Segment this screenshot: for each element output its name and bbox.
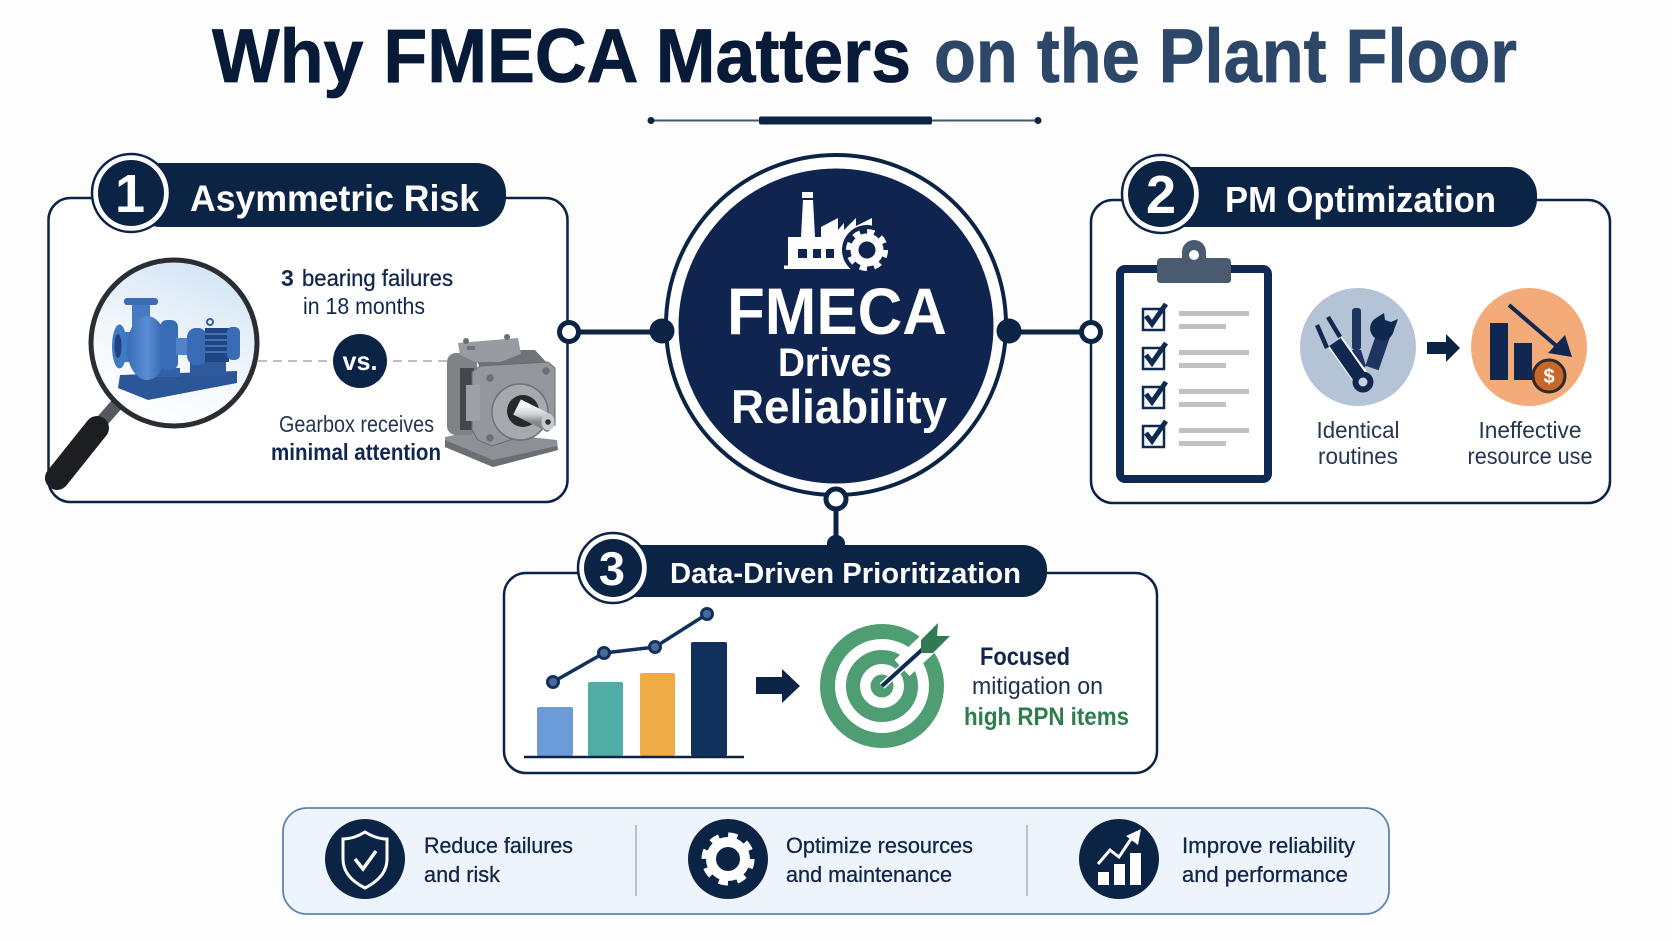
text: gearbox attention: minimal attention bbox=[271, 439, 441, 465]
panel 3 heading pill: Data-Driven Prioritization bbox=[670, 558, 1021, 590]
connector: hub to panel 2 bbox=[1009, 330, 1092, 334]
benefit 3: improve reliability: Improve reliability bbox=[1182, 833, 1355, 858]
text: focused mitigation: high RPN items bbox=[964, 703, 1129, 731]
title: Why FMECA Matters bbox=[212, 14, 911, 99]
text: identical routines: Identical bbox=[1316, 417, 1400, 443]
arrow: chart to target bbox=[756, 669, 800, 703]
benefit 3: improve reliability bbox=[1079, 819, 1355, 899]
central hub: FMECA Drives Reliability: Drives bbox=[778, 341, 892, 385]
text: identical routines: routines bbox=[1318, 443, 1398, 469]
panel 1 heading pill: 1 bbox=[115, 164, 145, 224]
panel 2 heading pill: 2 bbox=[1146, 165, 1176, 225]
vs. badge: vs. bbox=[342, 346, 378, 376]
text: gearbox attention: Gearbox receives bbox=[279, 411, 434, 437]
title divider bbox=[648, 116, 1042, 124]
text: bearing failures: in 18 months bbox=[303, 293, 425, 319]
panel 2: PM Optimization bbox=[1082, 155, 1610, 503]
vs. badge bbox=[333, 334, 387, 388]
text: ineffective resource use: resource use bbox=[1468, 443, 1592, 469]
central hub: FMECA Drives Reliability: FMECA bbox=[727, 274, 947, 348]
icon: tools circle bbox=[1300, 288, 1416, 406]
title bbox=[212, 14, 1517, 99]
title: on the Plant Floor bbox=[934, 14, 1517, 99]
icon: factory with gear bbox=[784, 192, 892, 275]
arrow: tools to resource use bbox=[1427, 334, 1460, 362]
benefits bar bbox=[283, 808, 1389, 914]
text: focused mitigation bbox=[964, 643, 1129, 731]
benefit 2: optimize resources: and maintenance bbox=[786, 862, 952, 887]
icon: blue centrifugal pump bbox=[112, 298, 240, 400]
icon: clipboard checklist bbox=[1120, 240, 1268, 479]
panel 1 heading pill: Asymmetric Risk bbox=[190, 178, 479, 219]
benefit 3: improve reliability: and performance bbox=[1182, 862, 1348, 887]
panel 2 heading pill bbox=[1122, 155, 1537, 233]
icon: green target with arrow bbox=[828, 623, 950, 740]
text: focused mitigation: mitigation on bbox=[972, 673, 1103, 700]
panel 3: Data-Driven Prioritization bbox=[504, 533, 1157, 773]
icon: declining cost circle: $ bbox=[1543, 366, 1555, 388]
panel 1 heading pill bbox=[92, 154, 506, 232]
central hub: FMECA Drives Reliability bbox=[650, 155, 1022, 509]
text: bearing failures bbox=[281, 265, 453, 319]
panel 3 heading pill: 3 bbox=[599, 542, 625, 595]
icon: grey gearbox bbox=[445, 334, 558, 467]
panel 3 heading pill bbox=[578, 533, 1047, 603]
text: bearing failures: 3 bbox=[281, 265, 294, 291]
benefit 1: reduce failures: Reduce failures bbox=[424, 833, 573, 858]
benefit 1: reduce failures bbox=[325, 819, 573, 899]
connector: hub to panel 3 bbox=[827, 499, 845, 553]
dashed comparison line bbox=[258, 360, 448, 362]
text: ineffective resource use: Ineffective bbox=[1478, 417, 1582, 443]
bar chart with trend line bbox=[524, 608, 744, 757]
icon: declining cost circle bbox=[1471, 288, 1587, 406]
panel 2 heading pill: PM Optimization bbox=[1225, 179, 1496, 220]
icon: magnifying glass bbox=[57, 260, 257, 478]
panel 1: Asymmetric Risk bbox=[48, 154, 578, 502]
central hub: FMECA Drives Reliability: Reliability bbox=[731, 380, 947, 433]
text: identical routines bbox=[1316, 417, 1400, 469]
benefit 2: optimize resources: Optimize resources bbox=[786, 833, 973, 858]
text: bearing failures: bearing failures bbox=[302, 265, 453, 291]
text: gearbox attention bbox=[271, 411, 441, 465]
benefit 2: optimize resources bbox=[688, 819, 973, 899]
text: ineffective resource use bbox=[1468, 417, 1592, 469]
text: focused mitigation: Focused bbox=[980, 643, 1070, 671]
benefit 1: reduce failures: and risk bbox=[424, 862, 501, 887]
connector: hub to panel 1 bbox=[569, 330, 662, 334]
